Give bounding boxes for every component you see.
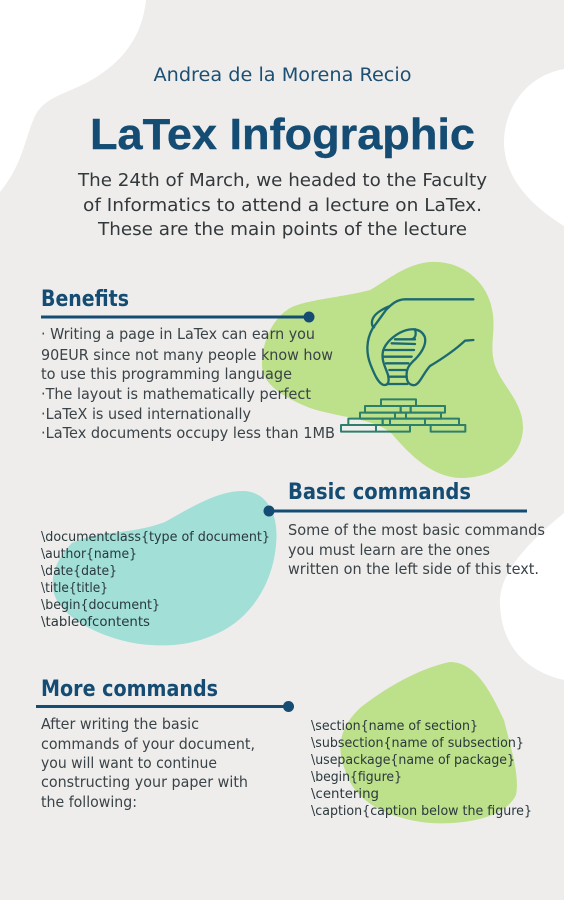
- panel: more commands: [36, 677, 294, 811]
- teal blob behind basic commands list: [53, 491, 276, 645]
- intro text: The 24th of March, we headed to the Faculty: [77, 170, 487, 191]
- list: basic commands: [41, 530, 270, 630]
- green blob behind more commands list: [340, 662, 517, 823]
- list: more commands: \section{name of section}: [311, 719, 478, 734]
- list: basic commands: \title{title}: [41, 581, 108, 596]
- list: basic commands: \author{name}: [41, 547, 137, 562]
- basic commands text: you must learn are the ones: [288, 541, 490, 559]
- heading: more commands: More commands: [41, 677, 218, 702]
- list: basic commands: \begin{document}: [41, 598, 160, 613]
- benefits text: [41, 325, 335, 442]
- basic commands text: Some of the most basic commands: [288, 521, 545, 539]
- benefits text: to use this programming language: [41, 365, 292, 383]
- list: more commands: \begin{figure}: [311, 770, 402, 785]
- green blob behind benefits: [262, 262, 523, 478]
- more commands text: commands of your document,: [41, 735, 255, 753]
- more commands text: you will want to continue: [41, 754, 217, 772]
- list: more commands: \usepackage{name of package}: [311, 753, 515, 768]
- benefits text: ·The layout is mathematically perfect: [41, 385, 311, 403]
- heading: benefits: Benefits: [41, 287, 129, 312]
- white corner blob: top left: [0, 0, 146, 192]
- more commands text: constructing your paper with: [41, 773, 248, 791]
- icon: hand placing coins on a stack: [341, 299, 473, 432]
- connector line: basic commands: [264, 506, 527, 516]
- list: basic commands: \tableofcontents: [41, 615, 150, 630]
- more commands text: the following:: [41, 793, 137, 811]
- connector line: more commands: [36, 701, 294, 712]
- benefits text: ·LaTeX is used internationally: [41, 405, 251, 423]
- white blob: upper right: [504, 69, 564, 226]
- list: more commands: \centering: [311, 787, 379, 802]
- basic commands text: [288, 521, 545, 578]
- list: basic commands: \date{date}: [41, 564, 117, 579]
- heading: basic commands: Basic commands: [288, 480, 471, 505]
- more commands text: After writing the basic: [41, 715, 199, 733]
- list: more commands: \subsection{name of subsection}: [311, 736, 524, 751]
- panel: basic commands: [264, 480, 545, 578]
- list: more commands: \caption{caption below the figure}: [311, 804, 532, 819]
- list: basic commands: \documentclass{type of document}: [41, 530, 270, 545]
- panel: benefits: [41, 287, 335, 442]
- intro text: of Informatics to attend a lecture on LaTex.: [83, 195, 482, 216]
- basic commands text: written on the left side of this text.: [288, 560, 539, 578]
- list: more commands: [311, 719, 532, 819]
- intro text: [77, 170, 487, 240]
- white blob: lower right: [500, 513, 564, 680]
- more commands text: [41, 715, 255, 811]
- title: LaTex Infographic: [90, 110, 475, 159]
- intro text: These are the main points of the lecture: [97, 219, 467, 240]
- benefits text: · Writing a page in LaTex can earn you: [41, 325, 315, 343]
- benefits text: 90EUR since not many people know how: [41, 346, 333, 364]
- benefits text: ·LaTex documents occupy less than 1MB: [41, 424, 335, 442]
- connector line: benefits: [41, 312, 314, 322]
- author: Andrea de la Morena Recio: [154, 65, 412, 86]
